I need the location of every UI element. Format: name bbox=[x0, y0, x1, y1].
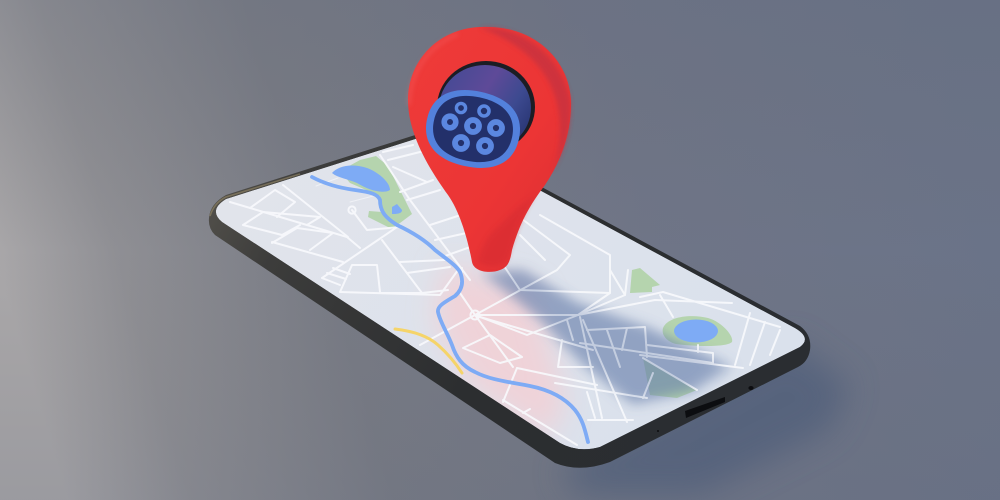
map screen bbox=[216, 133, 805, 449]
park areas bbox=[340, 156, 732, 398]
river bbox=[312, 177, 588, 442]
socket recess ring bbox=[437, 61, 535, 153]
pin body bbox=[408, 27, 571, 272]
pin rim shading bbox=[480, 28, 570, 172]
pink reflection bbox=[435, 265, 565, 440]
pin shadow over streets bbox=[490, 272, 720, 400]
pin folds bbox=[478, 195, 535, 266]
charging port bbox=[685, 397, 725, 418]
yellow road bbox=[395, 329, 462, 373]
phone bbox=[209, 129, 810, 468]
socket barrel bbox=[439, 65, 531, 151]
location pin bbox=[408, 27, 571, 272]
street network bbox=[230, 145, 780, 445]
phone shadow on surface bbox=[560, 340, 850, 495]
pin shadow on screen bbox=[480, 270, 733, 405]
socket face inner bbox=[427, 89, 519, 169]
phone edge highlight bbox=[210, 174, 300, 216]
speaker hole bbox=[748, 386, 754, 390]
charging socket bbox=[419, 61, 535, 176]
lakes bbox=[332, 166, 718, 342]
pin left highlight bbox=[409, 34, 458, 105]
microphone hole bbox=[657, 430, 659, 432]
connector pins bbox=[444, 103, 502, 152]
phone body bbox=[209, 129, 810, 468]
socket face rim bbox=[419, 82, 527, 176]
